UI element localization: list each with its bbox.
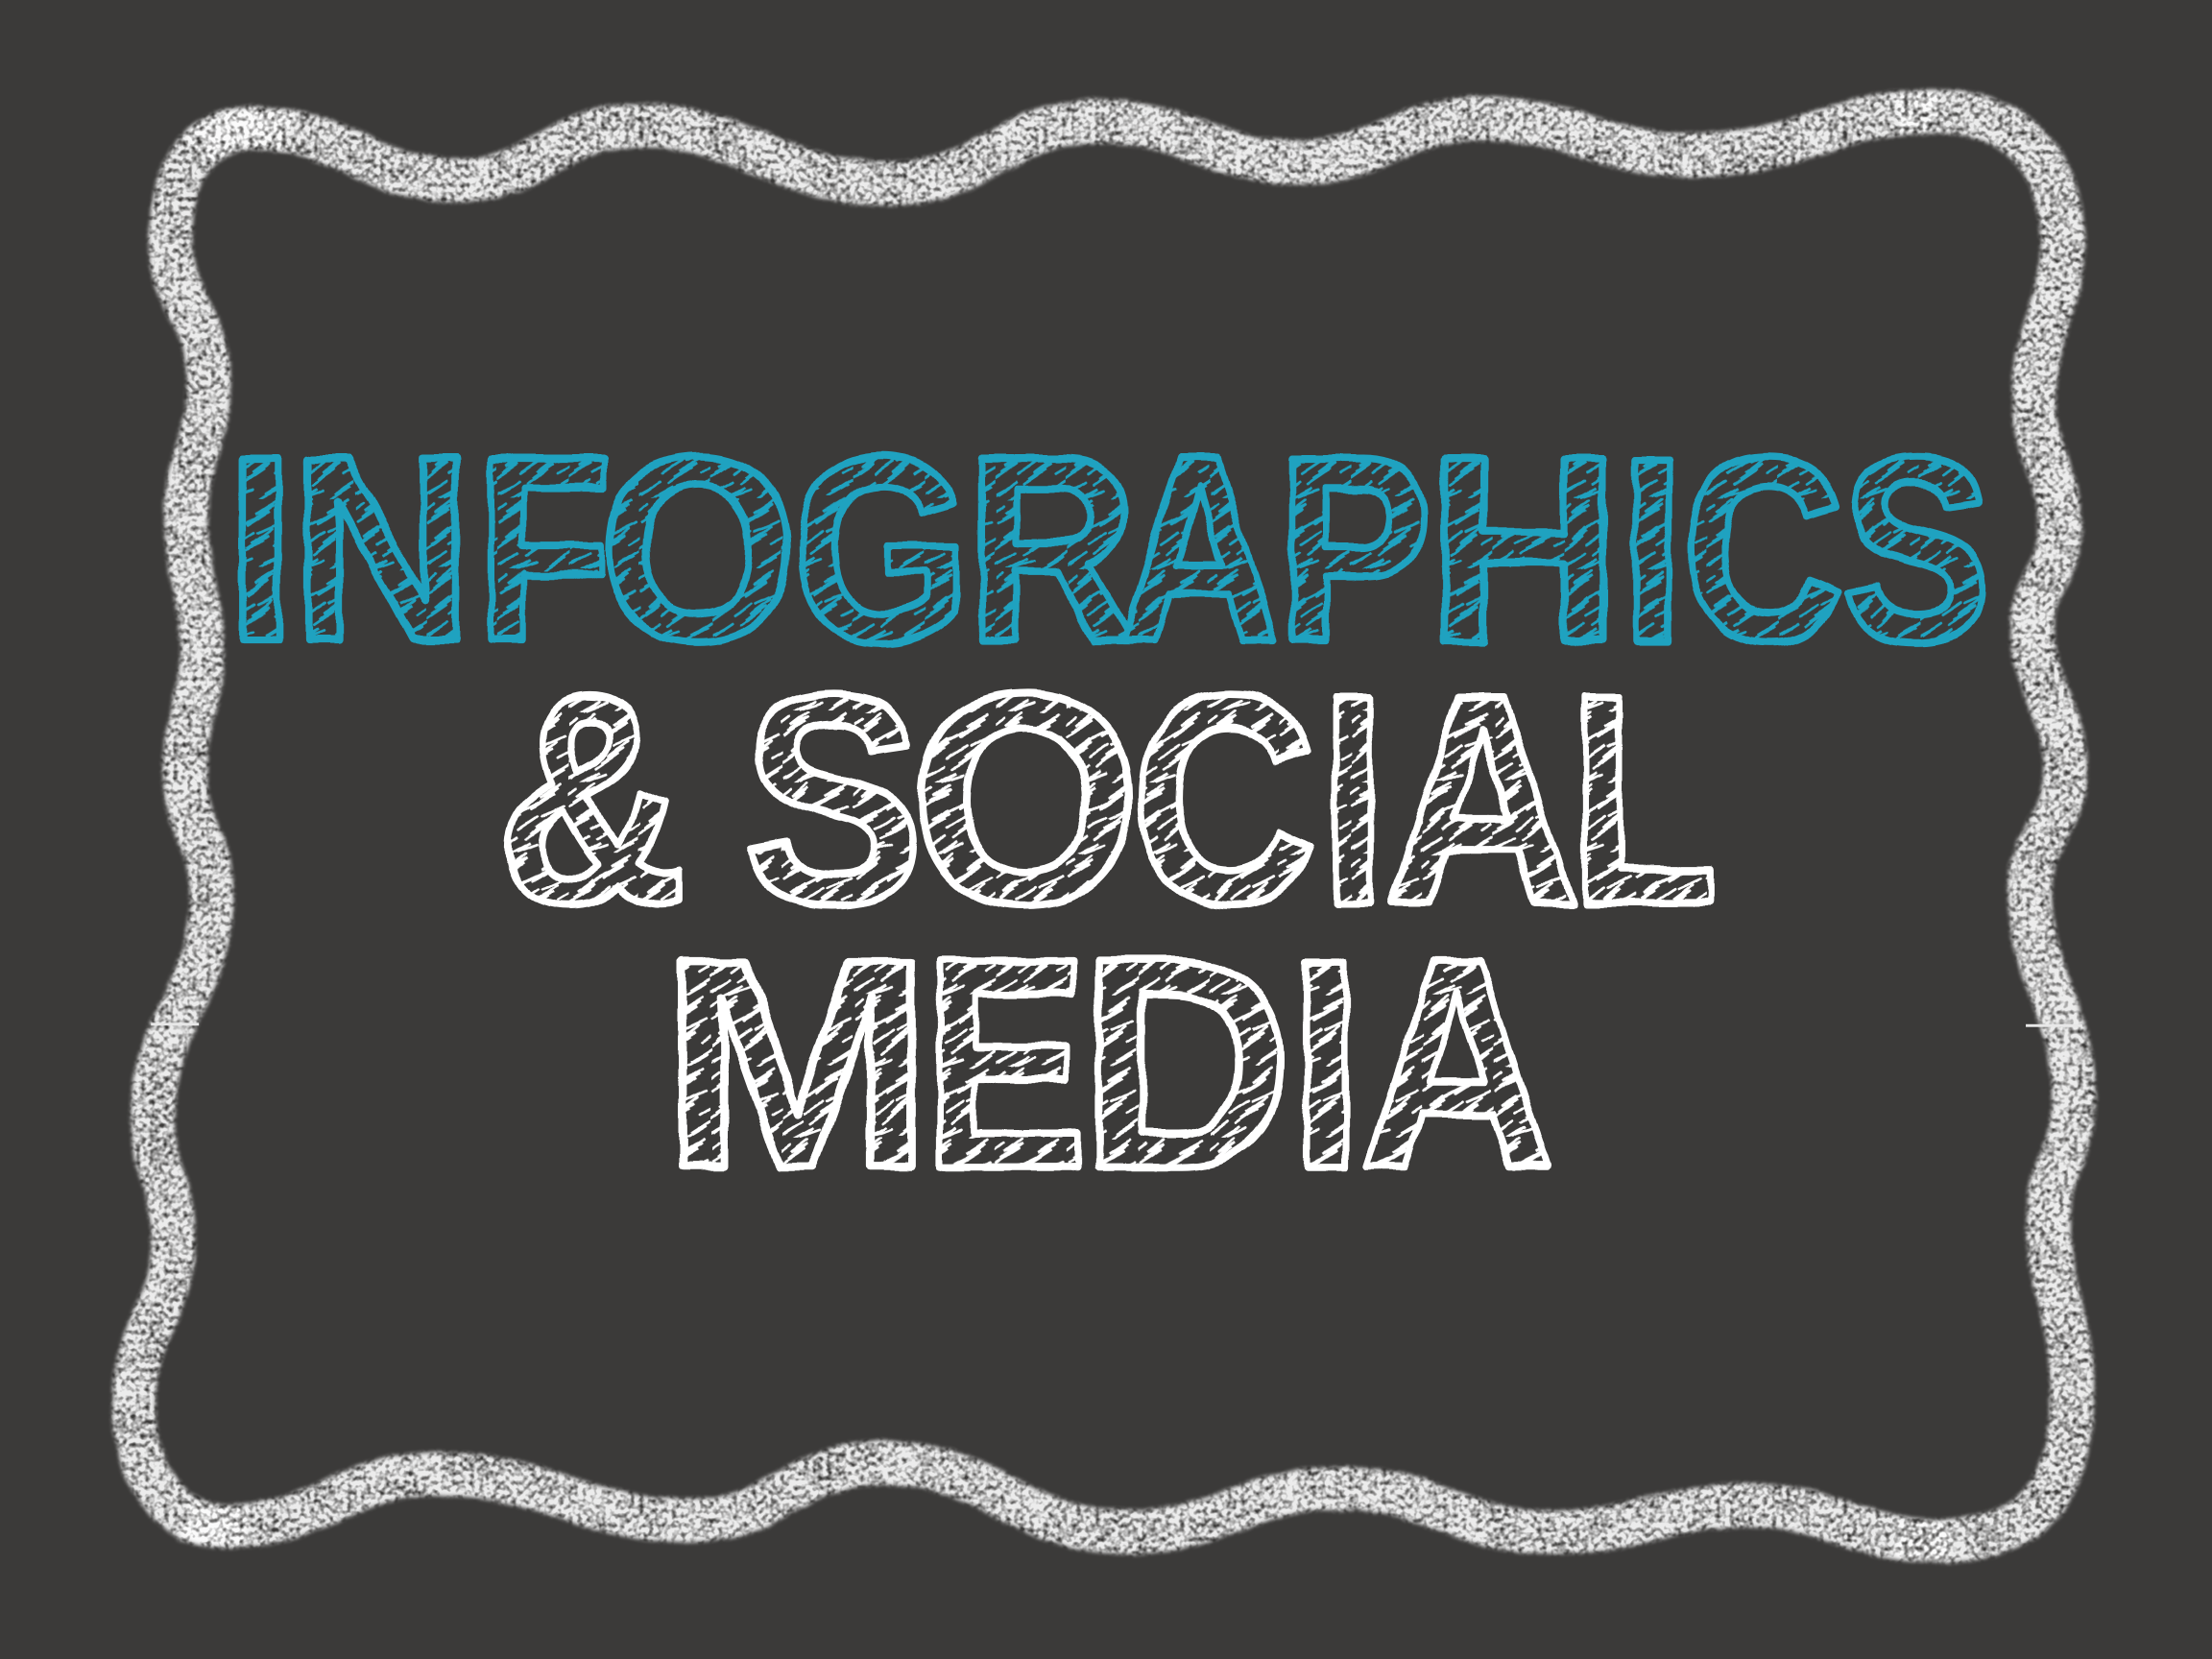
heading line: INFOGRAPHICS: R <box>966 402 1138 697</box>
frame seam left <box>151 1022 199 1025</box>
title: headline lettering <box>226 402 1991 1231</box>
heading line: INFOGRAPHICS: A <box>1118 402 1281 697</box>
heading line: MEDIA: I <box>1289 897 1362 1231</box>
heading line: & SOCIAL: & <box>497 633 686 967</box>
heading line: INFOGRAPHICS: O <box>599 402 797 697</box>
heading line: & SOCIAL: L <box>1569 633 1719 967</box>
heading line: & SOCIAL: C <box>1131 633 1317 967</box>
heading line: & SOCIAL: I <box>1319 633 1387 967</box>
heading line: INFOGRAPHICS: I <box>226 402 295 697</box>
heading line: INFOGRAPHICS: P <box>1277 402 1431 697</box>
heading line: & SOCIAL: S <box>742 633 924 967</box>
heading line: MEDIA: D <box>1079 897 1293 1231</box>
heading line: INFOGRAPHICS: I <box>1621 402 1684 697</box>
heading line: MEDIA: A <box>1359 897 1554 1231</box>
heading line: INFOGRAPHICS: S <box>1841 402 1991 697</box>
heading line: INFOGRAPHICS: H <box>1427 402 1621 697</box>
wavy chalk frame <box>134 111 2074 1541</box>
heading line: INFOGRAPHICS: G <box>793 402 970 697</box>
heading line: INFOGRAPHICS: F <box>476 402 612 697</box>
heading line: INFOGRAPHICS: N <box>291 402 472 697</box>
heading line: INFOGRAPHICS: C <box>1682 402 1844 697</box>
heading line: & SOCIAL: O <box>911 633 1142 967</box>
heading line: & SOCIAL: A <box>1384 633 1579 967</box>
frame seam right <box>2026 1024 2082 1027</box>
heading line: MEDIA: M <box>661 897 933 1231</box>
heading line: MEDIA: E <box>924 897 1087 1231</box>
